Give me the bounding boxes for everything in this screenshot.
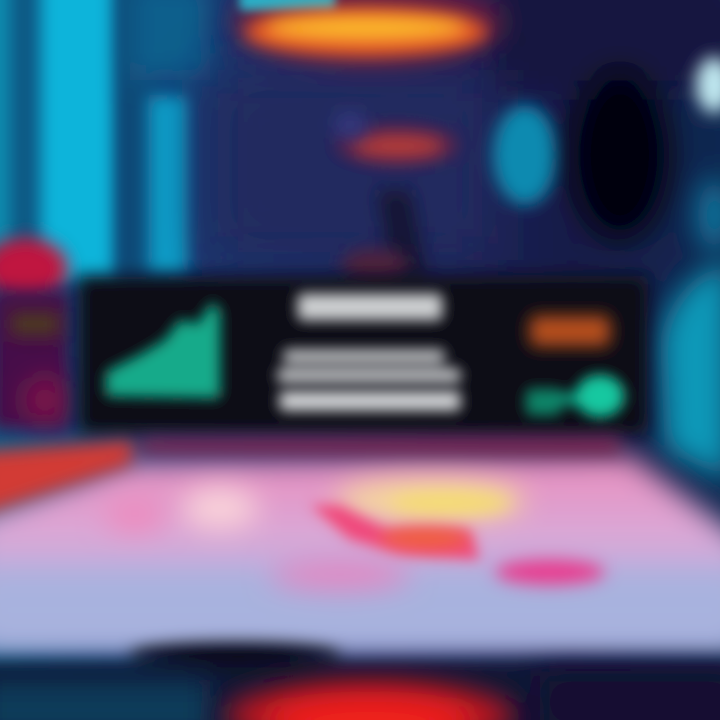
icon: small red lamp — [332, 111, 459, 165]
panel: right cyan pillar — [660, 262, 720, 480]
stand connecting lamp to board — [378, 190, 428, 280]
panel: bottom dark floor — [0, 643, 720, 720]
panel: table surface — [0, 455, 720, 650]
chart: green rising area — [106, 302, 220, 398]
panel: top dark right wall — [210, 0, 720, 260]
text block: blurred heading — [298, 294, 442, 320]
text block: blurred body lines — [278, 350, 460, 410]
panel: dark dashboard board — [78, 276, 648, 434]
icon: red left table edge — [0, 440, 135, 515]
icon: red floor glow — [225, 682, 515, 720]
icon: ceiling lamp — [233, 0, 503, 64]
icon: orange bar — [530, 316, 610, 346]
chart: green sparkline — [526, 375, 624, 417]
icon: left red object — [0, 238, 70, 430]
panel: left cyan columns — [0, 0, 210, 280]
chart: colourful paper marks on table — [105, 480, 605, 589]
icon: right dark sphere with blue glow — [493, 57, 720, 251]
